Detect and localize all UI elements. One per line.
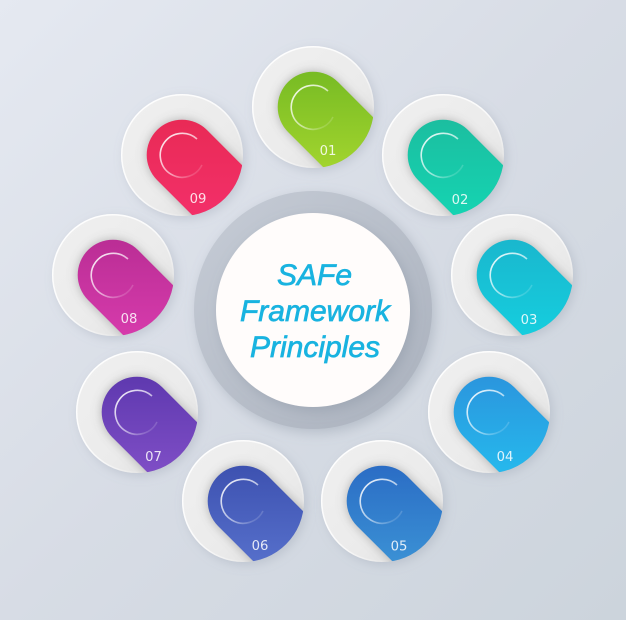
title: Principles (250, 331, 380, 364)
principle 06 (182, 440, 308, 566)
title: SAFe (277, 259, 352, 292)
principle 08: 08 (121, 312, 137, 327)
hub white disc (216, 213, 410, 407)
principle 01 (252, 46, 378, 172)
principle 01: 01 (320, 144, 336, 159)
principle 07 (76, 351, 202, 478)
principle 04 (428, 351, 554, 477)
hub outer ring (194, 191, 432, 429)
principle 03 (451, 214, 578, 340)
principle 02 (382, 94, 508, 220)
principle 07: 07 (145, 450, 162, 465)
principle 03: 03 (521, 313, 537, 328)
principle 05: 05 (391, 540, 407, 554)
principle 05 (321, 440, 447, 566)
principle 06: 06 (252, 539, 268, 554)
title: Framework (240, 295, 392, 328)
center hub (194, 191, 432, 429)
principle 08 (52, 214, 178, 340)
principle 02: 02 (452, 193, 468, 208)
principle 04: 04 (497, 450, 513, 465)
principle 09: 09 (190, 192, 206, 207)
title (240, 259, 392, 364)
principle 09 (121, 94, 248, 221)
